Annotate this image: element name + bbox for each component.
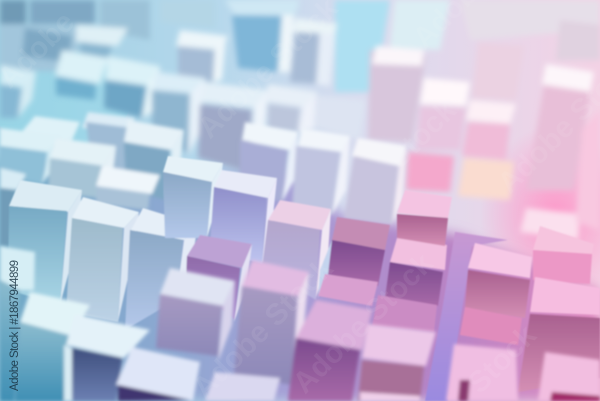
bar: purple [186, 235, 252, 322]
front bar: lavender blue [116, 347, 200, 401]
bar: mauve [318, 274, 378, 306]
floor shade behind bars [0, 160, 600, 401]
front bar: magenta [288, 300, 372, 401]
bar: far right front [518, 277, 600, 392]
watermarks: Adobe Stock [287, 247, 440, 400]
bar: orchid [385, 238, 447, 306]
front bar: pale plum [358, 324, 436, 401]
bar: pink low [460, 307, 522, 345]
bar: rose [397, 190, 452, 246]
bar: plum [318, 217, 390, 298]
sharp central bars [8, 156, 600, 401]
bar: steel 2 [66, 197, 139, 322]
bar: steel 1 [8, 180, 82, 305]
front bar: low pale [205, 372, 280, 401]
bar: pink strip [425, 232, 508, 401]
middle row bars, lightly blurred [0, 112, 406, 246]
front bar: pale left [0, 246, 35, 401]
bar: lavender [210, 170, 277, 265]
watermarks: Stock [462, 319, 543, 400]
front bar: mid [156, 268, 235, 362]
back rows of blurred bars [0, 0, 600, 240]
watermarks: Adobe Stock [187, 252, 340, 401]
front bar: teal [15, 292, 90, 401]
bar: far right [533, 226, 594, 284]
front bar: corner [538, 352, 600, 401]
stock image id caption: Adobe Stock | #1867944899 [9, 260, 21, 391]
front bar: lilac centre [234, 260, 309, 385]
bar: teal [163, 156, 223, 238]
front bar: navy [64, 314, 150, 401]
foreground bars, strongly blurred [0, 246, 600, 401]
bar: lilac [262, 200, 331, 300]
bar: pink right [465, 243, 532, 318]
bar: steel 3 [125, 208, 198, 330]
watermarks: Stock [382, 94, 463, 175]
front bar: light pink [446, 344, 518, 401]
